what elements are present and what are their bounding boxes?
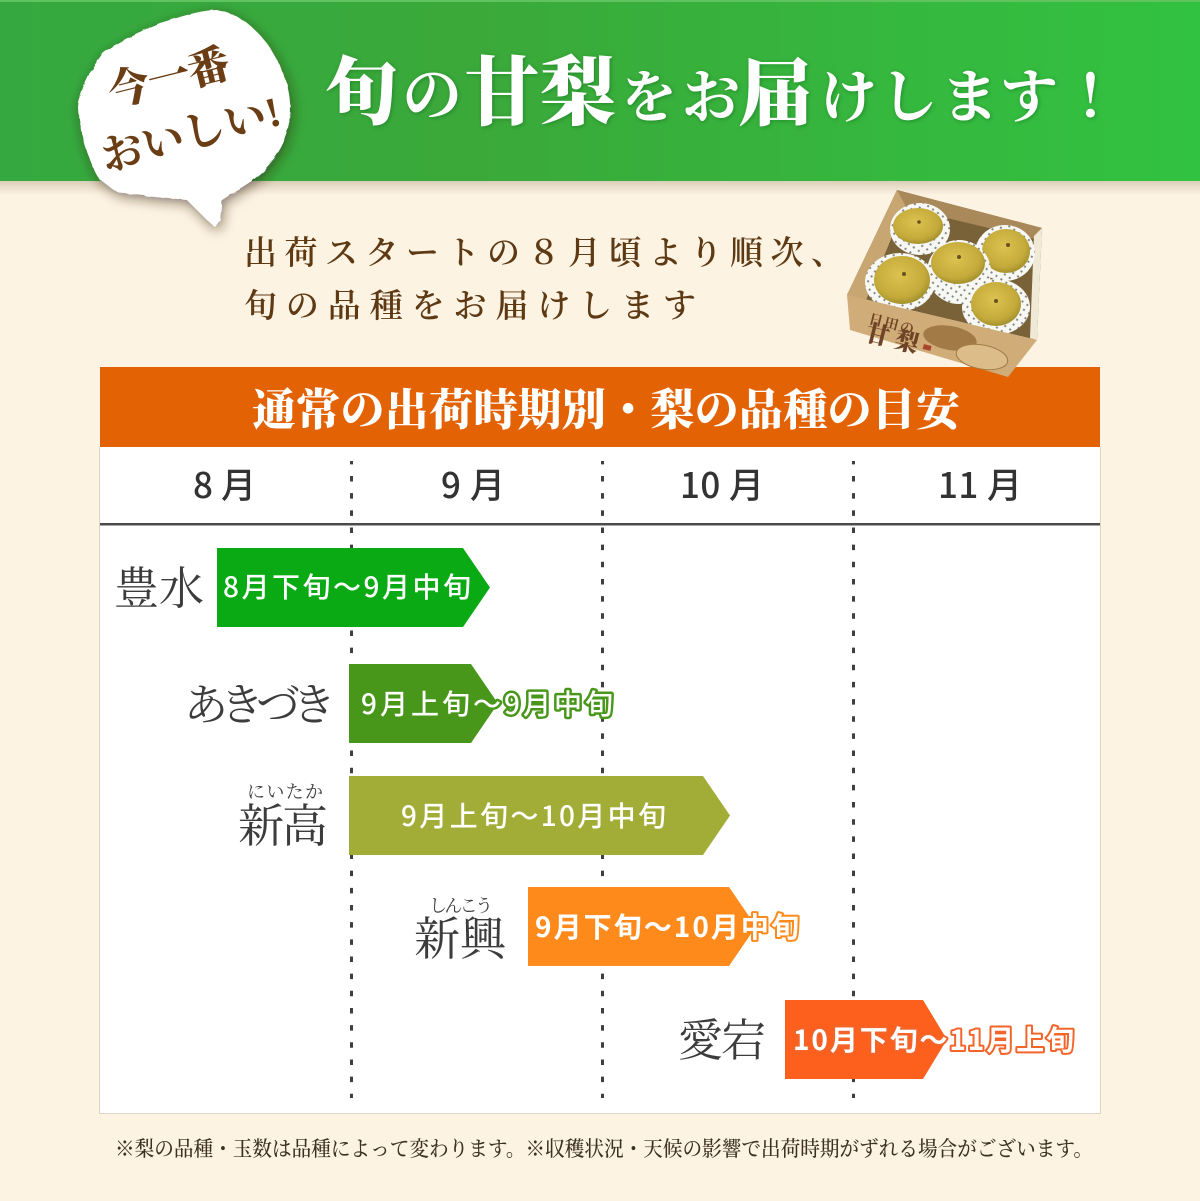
month labels: 11 月 — [938, 458, 1022, 509]
variety: 新高: 新高 — [238, 801, 328, 852]
variety: 豊水 — [114, 548, 490, 627]
main title: 梨 — [540, 52, 616, 136]
orange table heading: 通常の出荷時期別・梨の品種の目安 — [252, 386, 961, 435]
box label: 甘梨 — [863, 320, 921, 359]
main title: ま — [941, 65, 999, 130]
month labels: 8 月 — [193, 458, 256, 509]
subtitle text — [244, 235, 844, 325]
pear: front left — [865, 253, 935, 311]
main title: ！ — [1076, 65, 1134, 130]
variety: 豊水: 豊水 — [114, 564, 204, 614]
variety: あきづき — [184, 664, 613, 743]
main title: 甘 — [464, 52, 540, 136]
subtitle text: 旬の品種をお届けします — [244, 288, 696, 325]
variety: あきづき: あきづき — [184, 681, 336, 730]
footnote: ※梨の品種・玉数は品種によって変わります。※収穫状況・天候の影響で出荷時期がずれる場合がございます。 — [115, 1137, 1093, 1161]
month labels: 9 月 — [441, 458, 505, 509]
variety: 新高 — [238, 776, 730, 855]
main title — [325, 52, 1134, 136]
variety: 新高: にいたか — [247, 782, 323, 802]
pear: middle — [927, 240, 991, 304]
variety: 新興: 新興 — [414, 914, 509, 965]
main title: す — [1000, 65, 1058, 130]
variety: 豊水: 8月下旬～9月中旬 — [223, 566, 471, 606]
pear: back left — [890, 203, 950, 255]
month labels: 10 月 — [680, 458, 764, 509]
schedule table panel — [100, 447, 1100, 1114]
variety: 愛宕: 愛宕 — [678, 1016, 766, 1066]
variety: あきづき: 9月上旬～9月中旬 — [361, 683, 613, 723]
main title: の — [402, 63, 462, 129]
pear: back right — [975, 225, 1035, 281]
variety: 愛宕 — [678, 1000, 1074, 1079]
main title: お — [682, 65, 740, 130]
icon: box of pears — [847, 190, 1042, 377]
month labels — [193, 458, 1022, 509]
speech bubble callout — [78, 10, 290, 227]
variety: 新高: 9月上旬～10月中旬 — [401, 795, 666, 835]
variety: 愛宕: 10月下旬～11月上旬 — [793, 1019, 1074, 1059]
main title: 届 — [738, 54, 812, 136]
variety: 新興: しんこう — [429, 896, 493, 916]
header band — [0, 0, 1200, 195]
variety: 新興 — [414, 887, 799, 966]
bubble text: おいしい! — [96, 89, 286, 181]
subtitle text: 出荷スタートの８月頃より順次、 — [244, 235, 844, 272]
bubble text — [96, 40, 286, 181]
main title: を — [621, 68, 677, 130]
main title: け — [819, 65, 877, 130]
orange table heading — [100, 367, 1100, 447]
main title: し — [880, 65, 938, 130]
variety: 新興: 9月下旬～10月中旬 — [535, 906, 799, 946]
box label: 日田の — [867, 311, 916, 338]
main title: 旬 — [325, 53, 399, 135]
pear: front right — [962, 279, 1030, 335]
bubble text: 今一番 — [103, 40, 235, 116]
